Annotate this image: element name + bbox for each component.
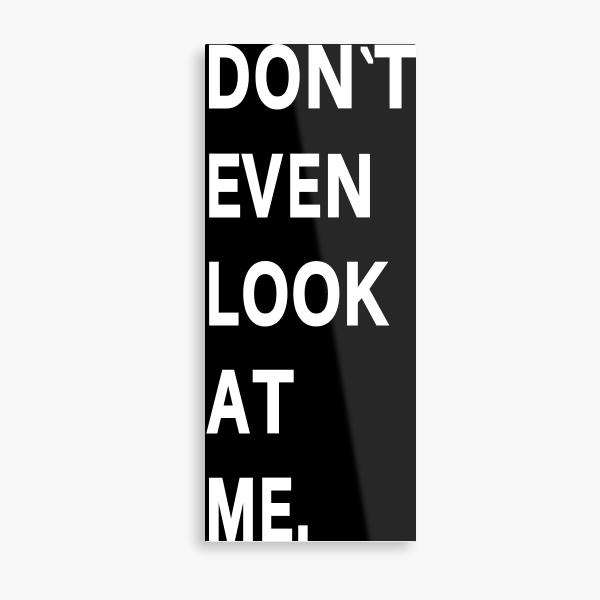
line: DON`T: O (254, 29, 301, 127)
line: DON`T (208, 44, 416, 110)
line: ME.: E (260, 461, 293, 559)
line: AT: T (253, 354, 293, 451)
line: EVEN: V (242, 136, 282, 234)
line: ME. (209, 478, 308, 541)
drop shadow (197, 52, 409, 548)
line: LOOK: O (292, 246, 341, 343)
line: LOOK: K (344, 246, 388, 344)
poster text (206, 27, 416, 559)
line: DON`T: D (206, 28, 250, 126)
line: ME.: M (206, 460, 256, 558)
line: LOOK (209, 261, 390, 326)
glossy black reflection area (195, 30, 370, 545)
black poster panel (205, 44, 416, 542)
line: EVEN: E (288, 137, 321, 235)
line: DON`T: N (305, 27, 355, 126)
line: LOOK: O (242, 246, 289, 344)
line: EVEN (209, 154, 370, 218)
line: ME.: . (296, 461, 310, 559)
line: DON`T: ` (360, 33, 375, 132)
line: AT: A (206, 354, 250, 452)
line: EVEN: E (207, 138, 241, 235)
line: LOOK: L (206, 245, 239, 343)
metal print poster scene (191, 44, 416, 554)
line: AT (206, 370, 294, 434)
bottom edge highlight (205, 541, 416, 542)
line: EVEN: N (324, 136, 373, 235)
line: DON`T: T (375, 27, 416, 126)
